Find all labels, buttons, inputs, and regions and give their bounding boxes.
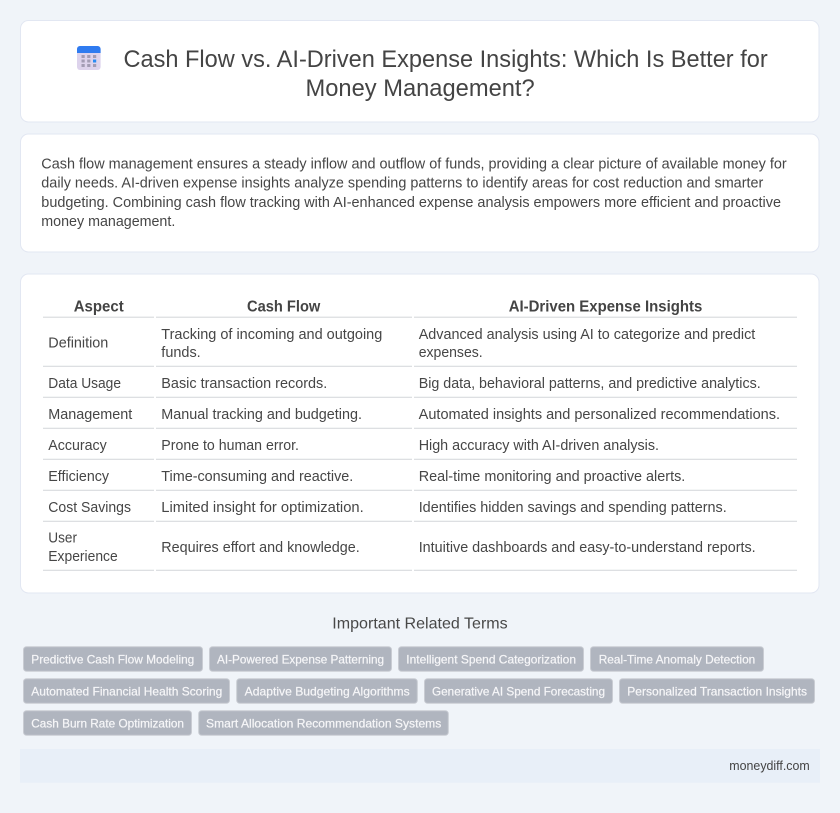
row: Definition: expenses. bbox=[419, 345, 483, 361]
row: Accuracy: High accuracy with AI-driven analysis. bbox=[419, 438, 659, 454]
table header: Cash Flow bbox=[247, 299, 321, 316]
chip: AI-Powered Expense Patterning: AI-Powered Expense Patterning bbox=[217, 652, 384, 666]
title: Cash Flow vs. AI-Driven Expense Insights: Which Is Better for bbox=[124, 46, 768, 73]
header panel bbox=[20, 20, 819, 122]
icon: calendar bbox=[77, 46, 101, 70]
chip: Real-Time Anomaly Detection: Real-Time Anomaly Detection bbox=[599, 652, 755, 666]
title bbox=[124, 46, 768, 102]
chip: Automated Financial Health Scoring: Automated Financial Health Scoring bbox=[31, 684, 222, 698]
table header: AI-Driven Expense Insights bbox=[509, 299, 702, 316]
chip: Predictive Cash Flow Modeling: Predictive Cash Flow Modeling bbox=[31, 652, 194, 666]
row: Data Usage bbox=[43, 376, 797, 398]
intro text: daily needs. AI-driven expense insights analyze spending patterns to identify areas for cost reduction and smarter bbox=[41, 176, 764, 192]
comparison table panel bbox=[20, 274, 819, 593]
chip: Intelligent Spend Categorization bbox=[398, 647, 584, 671]
row: Management bbox=[43, 407, 797, 429]
chip: Cash Burn Rate Optimization: Cash Burn Rate Optimization bbox=[31, 716, 184, 730]
table header bbox=[43, 299, 797, 318]
row: Cost Savings bbox=[43, 500, 797, 522]
intro text: money management. bbox=[41, 214, 175, 230]
row: Management: Manual tracking and budgeting. bbox=[161, 407, 362, 423]
chip: Adaptive Budgeting Algorithms bbox=[237, 679, 417, 703]
row: User Experience: User bbox=[48, 531, 77, 547]
row: Data Usage: Data Usage bbox=[48, 376, 121, 392]
intro text: budgeting. Combining cash flow tracking with AI-enhanced expense analysis empowers more efficient and proactive bbox=[41, 195, 781, 211]
row: Cost Savings: Identifies hidden savings and spending patterns. bbox=[419, 500, 727, 516]
title: Money Management? bbox=[306, 75, 535, 102]
row: User Experience: Requires effort and knowledge. bbox=[161, 540, 360, 556]
chip: Adaptive Budgeting Algorithms: Adaptive Budgeting Algorithms bbox=[245, 684, 410, 698]
row: Definition: funds. bbox=[161, 345, 201, 361]
chip: AI-Powered Expense Patterning bbox=[210, 647, 392, 671]
row: Efficiency: Time-consuming and reactive. bbox=[161, 469, 353, 485]
chip: Predictive Cash Flow Modeling bbox=[24, 647, 202, 671]
chip: Intelligent Spend Categorization: Intelligent Spend Categorization bbox=[406, 652, 576, 666]
intro panel bbox=[20, 134, 819, 252]
row: Management: Management bbox=[48, 407, 132, 423]
footer bbox=[20, 749, 820, 783]
row: Accuracy: Accuracy bbox=[48, 438, 107, 454]
chip: Generative AI Spend Forecasting: Generative AI Spend Forecasting bbox=[432, 684, 605, 698]
row: Accuracy: Prone to human error. bbox=[161, 438, 299, 454]
row: User Experience bbox=[43, 531, 797, 571]
row: Efficiency: Real-time monitoring and proactive alerts. bbox=[419, 469, 685, 485]
row: Definition: Tracking of incoming and outgoing bbox=[161, 327, 382, 343]
chip: Cash Burn Rate Optimization bbox=[24, 711, 192, 735]
chip: Automated Financial Health Scoring bbox=[24, 679, 230, 703]
row: User Experience: Experience bbox=[48, 549, 118, 565]
row: Definition: Definition bbox=[48, 336, 108, 352]
intro text: Cash flow management ensures a steady inflow and outflow of funds, providing a clear picture of available money for bbox=[41, 156, 787, 172]
row: Definition bbox=[43, 327, 797, 367]
row: Data Usage: Big data, behavioral patterns, and predictive analytics. bbox=[419, 376, 761, 392]
row: User Experience: Intuitive dashboards and easy-to-understand reports. bbox=[419, 540, 756, 556]
intro text bbox=[41, 156, 787, 230]
row: Cost Savings: Cost Savings bbox=[48, 500, 131, 516]
row: Efficiency: Efficiency bbox=[48, 469, 110, 485]
row: Accuracy bbox=[43, 438, 797, 460]
row: Management: Automated insights and personalized recommendations. bbox=[419, 407, 780, 423]
related terms section bbox=[24, 616, 814, 735]
chip: Smart Allocation Recommendation Systems bbox=[199, 711, 448, 735]
chip: Real-Time Anomaly Detection bbox=[590, 647, 764, 671]
chip: Personalized Transaction Insights bbox=[620, 679, 814, 703]
chip: Personalized Transaction Insights: Personalized Transaction Insights bbox=[627, 684, 807, 698]
footer source: moneydiff.com bbox=[729, 758, 810, 773]
chip: Smart Allocation Recommendation Systems: Smart Allocation Recommendation Systems bbox=[206, 716, 441, 730]
row: Cost Savings: Limited insight for optimization. bbox=[161, 500, 364, 516]
chip: Generative AI Spend Forecasting bbox=[424, 679, 612, 703]
row: Efficiency bbox=[43, 469, 797, 491]
row: Data Usage: Basic transaction records. bbox=[161, 376, 327, 392]
row: Definition: Advanced analysis using AI to categorize and predict bbox=[419, 327, 755, 343]
table header: Aspect bbox=[74, 299, 124, 316]
related terms heading: Important Related Terms bbox=[332, 616, 508, 633]
